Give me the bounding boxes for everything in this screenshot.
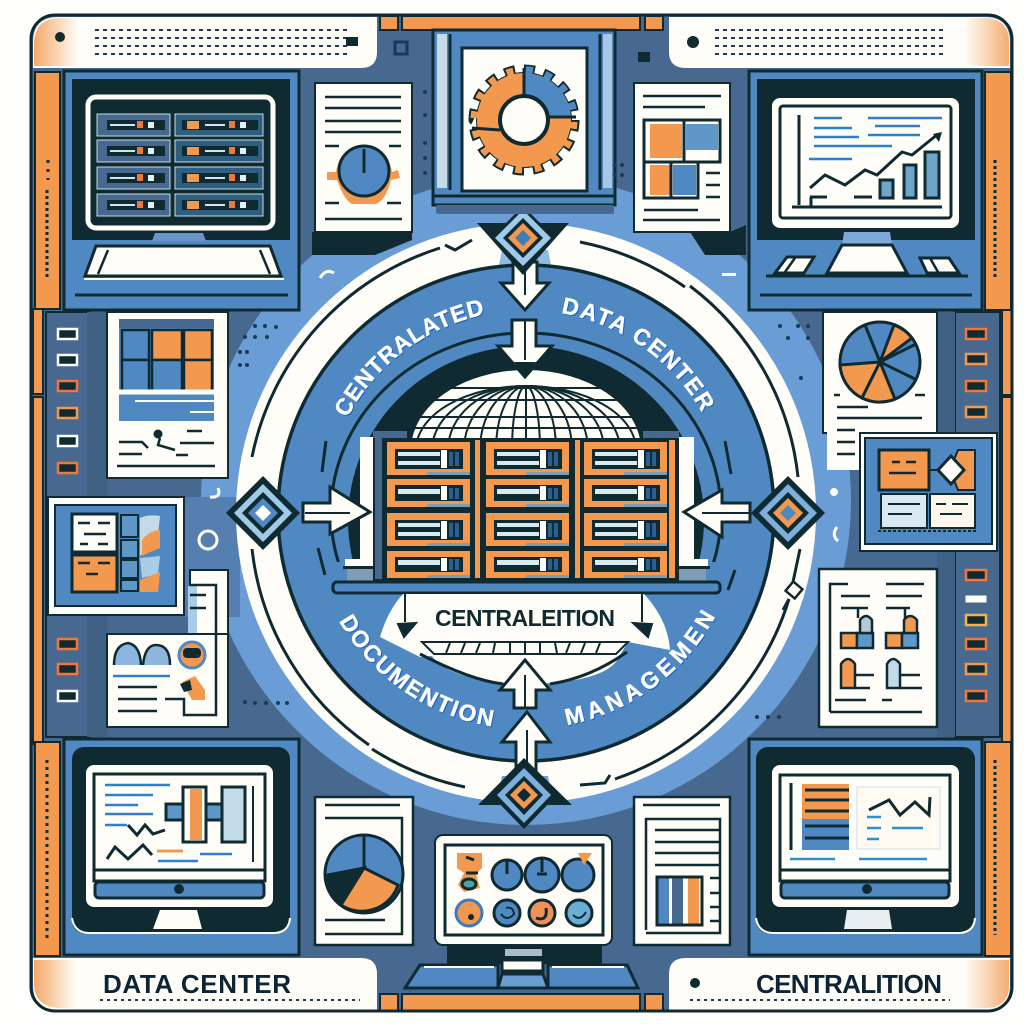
rack shelf: [333, 582, 720, 593]
icon: dial: [327, 146, 400, 204]
arrow: bottom inner: [500, 660, 550, 708]
icon: gear: [472, 68, 576, 170]
panel: left middle: [48, 497, 184, 615]
document: bottom left pie: [315, 797, 413, 945]
panel: top right monitor: [749, 71, 982, 310]
screen: [772, 765, 959, 907]
label: centralition: CENTRALITION: [756, 969, 942, 999]
panel: bottom right monitor: [749, 739, 982, 955]
rack side pillars: [360, 437, 374, 559]
white dome with grid: [412, 370, 640, 438]
centralition banner with bowl: [380, 594, 670, 684]
document: right lower: [819, 569, 937, 727]
diamond connector: right: [751, 476, 825, 550]
banner arrows: [398, 594, 652, 637]
text lines: [105, 785, 232, 861]
bottom right banner: [669, 958, 1010, 1010]
keyboard keys: [775, 257, 959, 273]
arrow: right: [684, 490, 750, 537]
color grid: [122, 330, 212, 392]
line charts: [107, 786, 253, 862]
arrow: bottom outer: [502, 712, 550, 770]
monitor bezel: [756, 747, 975, 933]
rack dividers: [475, 440, 675, 578]
document: bottom right: [634, 797, 730, 945]
banner text: CENTRALEITION: [435, 605, 615, 631]
bottom left banner: [33, 958, 377, 1010]
document: top left: [312, 83, 412, 255]
left side strip dots: [47, 160, 995, 940]
signature marks: [117, 431, 215, 466]
line chart: [792, 115, 942, 207]
keyboard: [405, 960, 638, 988]
screen: [772, 98, 959, 228]
monitor bezel: [72, 747, 290, 933]
central ring: [236, 226, 816, 800]
panel: right middle: [860, 433, 997, 551]
monitor bezel: [757, 79, 975, 240]
diamond connector: left: [226, 476, 300, 550]
screen: [86, 765, 273, 907]
blue ring: [278, 265, 774, 761]
panel: top gear monitor: [433, 30, 615, 214]
rail: right indicators: [937, 312, 1000, 737]
label: data center: DATA CENTER: [103, 969, 291, 999]
light blue halo: [201, 175, 851, 825]
top right banner: [669, 17, 1010, 68]
pie chart: [840, 322, 920, 402]
panel: bottom center monitor: [405, 835, 638, 988]
dark dome backdrop: [348, 348, 704, 559]
small charts: [114, 585, 216, 715]
document: right upper pie: [823, 312, 937, 470]
gauge icons: [456, 853, 594, 926]
ring text: documention: DOCUMENTION: [340, 614, 495, 728]
chart card: [857, 787, 940, 849]
striped table: [802, 784, 849, 819]
stand and keyboard: [152, 233, 206, 241]
ring dashes: [318, 441, 735, 590]
diamond connector: top: [477, 206, 569, 275]
ring segment lines: [252, 240, 800, 787]
arrow: left: [303, 487, 370, 534]
monitor bezel: [72, 79, 290, 240]
arrow: top outer: [501, 262, 549, 310]
arrow: top inner: [498, 320, 552, 377]
white outer ring: [236, 223, 816, 803]
chart text lines: [809, 118, 942, 159]
small dot clusters: [238, 42, 810, 719]
rack backing: [373, 431, 407, 439]
data cells: [72, 514, 117, 552]
server column 2: [486, 442, 569, 578]
small decorative icon marks: [199, 271, 838, 549]
server column 1: [387, 442, 470, 578]
ring text: centralated: CENTRALATED: [336, 300, 484, 416]
stand: [842, 232, 892, 245]
bar icons: [841, 616, 922, 688]
ring text: data center: DATA CENTER: [562, 297, 714, 414]
server rows: [97, 114, 263, 216]
rail: left indicators: [46, 312, 107, 737]
bar chart: [880, 152, 939, 198]
document: left lower: [107, 570, 228, 727]
box plot: [166, 804, 222, 820]
pie chart: [325, 835, 403, 913]
server column 3: [584, 442, 667, 578]
diagram blocks: [644, 120, 720, 198]
top left banner: [33, 17, 377, 68]
server rack: [333, 431, 720, 593]
document: left upper: [107, 312, 228, 478]
panel: top left monitor: [64, 71, 299, 310]
striped band: [420, 642, 628, 684]
screen: [88, 97, 273, 228]
document: top right: [634, 83, 746, 255]
diamond connector: bottom: [478, 758, 572, 829]
panel: bottom left monitor: [64, 739, 299, 955]
bar chart: [657, 877, 702, 925]
ring text: managemen: MANAGEMEN: [564, 609, 716, 726]
inner ring outline: [331, 332, 721, 562]
